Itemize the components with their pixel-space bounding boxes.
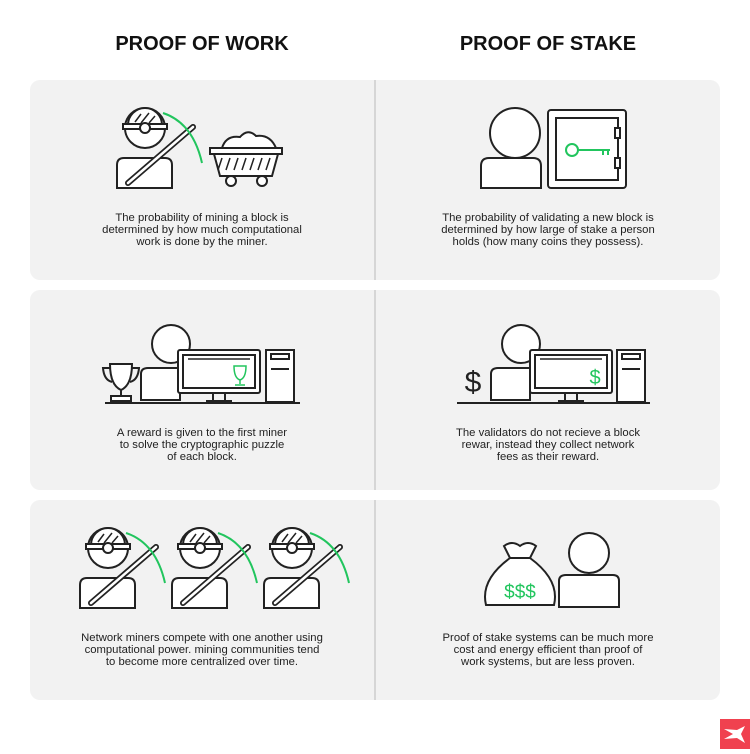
text: pow row 1: The probability of mining a block is [115, 212, 289, 224]
icon: money bag and person [485, 533, 619, 607]
text: pos row 2: fees as their reward. [497, 451, 599, 463]
icon: miner with cart [117, 108, 282, 188]
text: pos row 3: Proof of stake systems can be much more [443, 632, 653, 644]
text: pow row 2: A reward is given to the first miner [117, 427, 287, 439]
text: pos row 2: rewar, instead they collect network [462, 439, 635, 451]
text: pow row 2: of each block. [167, 451, 237, 463]
ore cart [210, 132, 282, 186]
text: pow row 3: Network miners compete with one another using [81, 632, 323, 644]
text: pos row 3: cost and energy efficient than proof of [454, 644, 643, 656]
panel: row 3 [30, 500, 720, 700]
text: pos row 2: The validators do not recieve a block [456, 427, 640, 439]
text: pos row 3: work systems, but are less proven. [460, 656, 635, 668]
text: pow row 3: computational power. mining communities tend [85, 644, 319, 656]
icon: dollar and computer: $ [589, 367, 601, 389]
icon: three miners [80, 528, 349, 608]
text: pow row 3: to become more centralized over time. [106, 656, 298, 668]
text: pos row 1: holds (how many coins they possess). [453, 236, 643, 248]
icon: money bag and person: $$$ [504, 582, 536, 603]
text: pow row 1: determined by how much computational [102, 224, 302, 236]
title: proof of work: PROOF OF WORK [115, 33, 289, 55]
icon: dollar and computer: $ [465, 366, 482, 399]
icon: dollar and computer [457, 325, 650, 403]
text: pos row 1: determined by how large of stake a person [441, 224, 655, 236]
logo [720, 719, 750, 749]
panel: row 2 [30, 290, 720, 490]
icon: trophy and computer [103, 325, 300, 403]
panel: row 1 [30, 80, 720, 280]
text: pos row 1: The probability of validating a new block is [442, 212, 654, 224]
text: pow row 1: work is done by the miner. [135, 236, 268, 248]
title: proof of stake: PROOF OF STAKE [460, 33, 636, 55]
text: pow row 2: to solve the cryptographic puzzle [120, 439, 284, 451]
icon: person with safe [481, 108, 626, 188]
